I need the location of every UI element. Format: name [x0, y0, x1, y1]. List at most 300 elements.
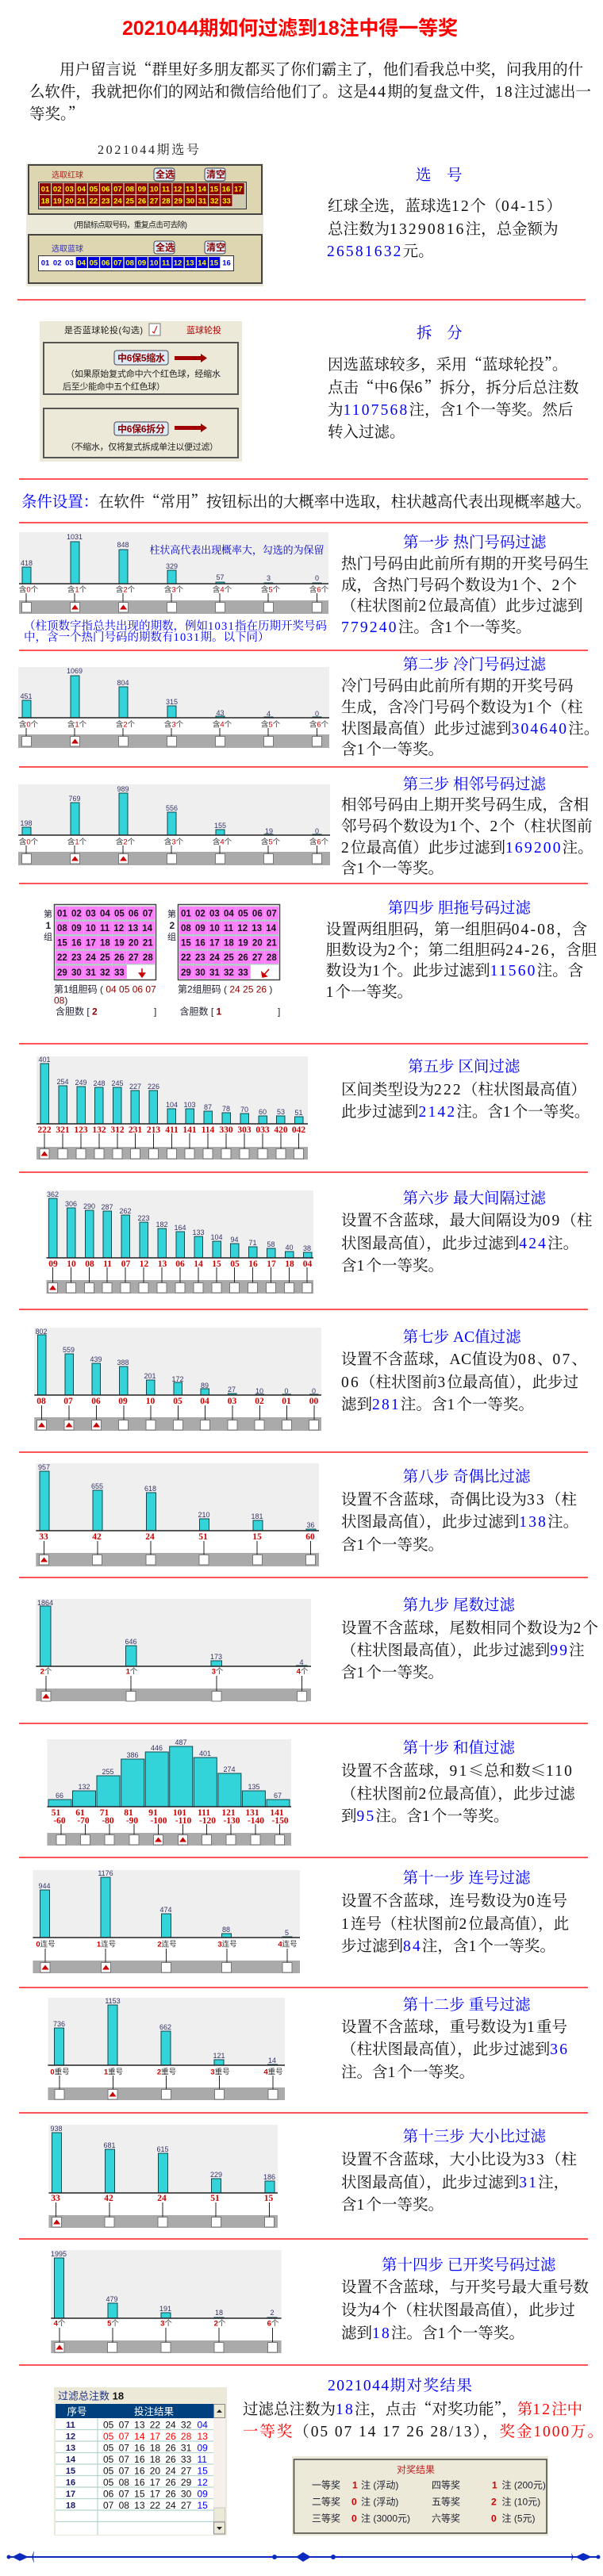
- bar chart: step 6: 94: [230, 1236, 239, 1244]
- results table: [54, 2387, 227, 2536]
- bar chart: step 3: 含1个: [67, 838, 87, 847]
- bar chart: step 6: [46, 1190, 313, 1294]
- chart note: [24, 619, 327, 644]
- bar chart: step 10: 131: [245, 1808, 259, 1818]
- panel: step 13: [48, 2125, 577, 2228]
- results table: 过滤总注数 18: [58, 2390, 124, 2402]
- bar chart: step 6: 04: [303, 1259, 313, 1269]
- prize summary box: 注 (3000元): [361, 2513, 410, 2524]
- heading: step 12: 第十二步 重号过滤: [403, 1996, 531, 2014]
- bar chart: step 1: 含3个: [164, 585, 184, 595]
- bar chart: step 6: 71: [248, 1239, 257, 1247]
- bar chart: step 7: 0: [312, 1387, 316, 1395]
- bar chart: step 6: 05: [230, 1259, 240, 1269]
- bar chart: step 2: 315: [166, 698, 178, 706]
- bar chart: step 10: -90: [126, 1816, 138, 1826]
- prize summary box: 注 (浮动): [361, 2479, 398, 2490]
- bar chart: step 11: 2连号: [157, 1940, 177, 1949]
- description: step 4: [326, 921, 597, 1001]
- bar chart: step 9: 4个: [297, 1667, 309, 1677]
- results table: 13: [66, 2444, 75, 2453]
- bar chart: step 14: 2: [270, 2309, 275, 2317]
- description: step 2: [341, 677, 599, 758]
- prize summary box: 对奖结果: [397, 2464, 435, 2475]
- bar chart: step 5: 51: [294, 1109, 303, 1117]
- bar chart: step 2: 1069: [67, 667, 83, 675]
- heading: step 1: 第一步 热门号码过滤: [403, 534, 547, 551]
- description: step 2: 生成，含冷门号码个数设为1个（柱: [341, 699, 583, 716]
- description: split: 转入过滤。: [328, 424, 405, 441]
- description: step 3: 含1个一等奖。: [341, 860, 444, 877]
- description: selection: 总注数为13290816注，总金额为: [328, 220, 559, 238]
- results table: 05 07 16 20 24 27 15: [103, 2465, 208, 2476]
- bar chart: step 5: 254: [56, 1078, 69, 1086]
- description: split: 为1107568注，含1个一等奖。然后: [328, 401, 573, 419]
- software screenshot: split options: 蓝球轮投: [186, 324, 221, 335]
- bar chart: step 1: 0: [315, 574, 319, 582]
- heading: step 6: 第六步 最大间隔过滤: [403, 1190, 546, 1207]
- bar chart: step 6: 06: [175, 1259, 185, 1269]
- bar chart: step 8: 655: [91, 1482, 103, 1490]
- description: step 12: （柱状图最高值），此步过滤到36: [341, 2041, 569, 2058]
- bar chart: step 2: 含2个: [116, 720, 136, 730]
- description: step 13: 设置不含蓝球，大小比设为33（柱: [341, 2151, 577, 2168]
- bar chart: step 1: 含0个: [19, 585, 39, 595]
- bar chart: step 6: 09: [48, 1259, 58, 1269]
- results table: 11: [66, 2421, 75, 2430]
- panel: number selection: [26, 143, 562, 286]
- description: step 5: 此步过滤到2142注。含1个一等奖。: [341, 1103, 590, 1121]
- bar chart: step 5: 249: [75, 1079, 87, 1087]
- description: step 10: 到95注。含1个一等奖。: [341, 1807, 509, 1825]
- number grids: dan tuo: 15 16 17 18 19 20 21: [57, 939, 153, 949]
- bar chart: step 10: 132: [78, 1783, 90, 1791]
- bar chart: step 8: 957: [38, 1463, 50, 1471]
- bar chart: step 1: 含5个: [261, 585, 281, 595]
- bar chart: step 7: 06: [91, 1397, 101, 1406]
- bar chart: step 5: 245: [111, 1079, 124, 1087]
- bar chart: step 6: 287: [101, 1203, 113, 1211]
- bar chart: step 13: 186: [263, 2173, 275, 2181]
- number grids: dan tuo: 08 09 10 11 12 13 14: [57, 924, 153, 933]
- description: step 7: [341, 1351, 587, 1413]
- software screenshot: ball selector: 18 19 20 21 22 23 24 25 26 27 28 29 30 31 32 33: [41, 197, 231, 206]
- results table: 16: [66, 2478, 75, 2487]
- prize summary box: 注 (浮动): [361, 2495, 398, 2508]
- prize summary box: 一等奖: [312, 2479, 340, 2490]
- description: step 14: 设置不含蓝球，与开奖号最大重号数: [341, 2279, 589, 2296]
- heading: step 9: 第九步 尾数过滤: [403, 1597, 515, 1614]
- panel: step 14: [51, 2250, 589, 2353]
- heading: step 5: 第五步 区间过滤: [408, 1058, 520, 1075]
- description: step 12: 设置不含蓝球，重号数设为1重号: [341, 2018, 567, 2036]
- bar chart: step 11: 1176: [98, 1869, 113, 1877]
- heading: step 8: 第八步 奇偶比过滤: [403, 1468, 531, 1485]
- bar chart: step 13: 42: [104, 2194, 113, 2203]
- bar chart: step 7: 10: [255, 1387, 263, 1395]
- bar chart: step 10: 487: [175, 1738, 187, 1746]
- number grids: dan tuo: 22 23 24 25 26 27 28: [181, 953, 277, 963]
- description: prize results: 过滤总注数为18注，点击“对奖功能”，第12注中: [243, 2397, 582, 2419]
- results table: 05 08 16 17 26 29 12: [103, 2477, 208, 2488]
- bar chart: step 3: 769: [68, 795, 81, 803]
- description: step 13: [341, 2151, 577, 2214]
- results table: 06 07 15 17 26 30 09: [103, 2489, 208, 2500]
- bar chart: step 13: 938: [50, 2125, 63, 2133]
- bar chart: step 10: 61: [75, 1808, 85, 1818]
- description: step 3: [341, 796, 593, 877]
- panel: step 2: [18, 656, 599, 758]
- bar chart: step 7: 10: [146, 1397, 156, 1406]
- bar chart: step 7: 388: [117, 1359, 129, 1367]
- bar chart: step 13: 681: [103, 2141, 116, 2149]
- description: prize results: 一等奖（05 07 14 17 26 28/13），奖金1000万。: [243, 2423, 603, 2440]
- prize summary box: 二等奖: [312, 2497, 340, 2508]
- bar chart: step 2: 含3个: [164, 720, 184, 730]
- software screenshot: ball selector: [26, 163, 263, 286]
- results table: 05 07 14 17 26 28 13: [103, 2431, 208, 2442]
- bar chart: step 13: 33: [51, 2194, 60, 2203]
- heading: selection: [416, 167, 463, 184]
- software screenshot: ball selector: 清空: [206, 241, 225, 253]
- bar chart: step 7: 27: [228, 1386, 236, 1393]
- bar chart: step 1: 含1个: [67, 585, 87, 595]
- bar chart: step 2: 451: [20, 692, 33, 700]
- panel: step 11: [33, 1869, 569, 1973]
- bar chart: step 3: 989: [117, 785, 129, 793]
- description: selection: 红球全选，蓝球选12个（04-15）: [328, 197, 562, 215]
- number grids: dan tuo: 2: [170, 920, 175, 931]
- panel: step 12: [48, 1996, 569, 2100]
- results table: 05 07 13 22 24 32 04: [103, 2419, 208, 2430]
- description: step 10: 设置不含蓝球，91≤总和数≤110: [341, 1758, 574, 1781]
- bar chart: step 5: 60: [259, 1108, 267, 1116]
- number grids: dan tuo: ]: [278, 1006, 280, 1017]
- software screenshot: ball selector: 01 02 03 04 05 06 07 08 09 10 11 12 13 14 15 16 17: [41, 186, 243, 194]
- bar chart: step 7: 05: [173, 1397, 182, 1406]
- bar chart: step 5: 103: [183, 1101, 196, 1109]
- results table: 05 07 16 18 26 33 11: [103, 2454, 207, 2465]
- number grids: dan tuo: 第: [167, 908, 176, 919]
- bar chart: step 5: 213: [147, 1125, 160, 1135]
- prize summary box: [292, 2456, 548, 2536]
- software screenshot: split options: 中6保6拆分: [117, 423, 165, 435]
- number grids: dan tuo: 15 16 17 18 19 20 21: [181, 939, 277, 949]
- bar chart: step 11: 474: [159, 1906, 172, 1914]
- description: step 10: （柱状图前2位最高值），此步过滤: [341, 1785, 575, 1803]
- bar chart: step 6: 306: [65, 1200, 77, 1208]
- bar chart: step 12: 1153: [105, 1997, 121, 2005]
- bar chart: step 5: 70: [240, 1106, 248, 1114]
- prize summary box: 1: [352, 2479, 358, 2490]
- bar chart: step 10: 71: [100, 1808, 109, 1818]
- prize summary box: 注 (10元): [501, 2495, 540, 2508]
- number grids: dan tuo: 08 09 10 11 12 13 14: [181, 924, 277, 933]
- bar chart: step 12: 14: [268, 2057, 276, 2064]
- bar chart: step 3: 含0个: [19, 838, 39, 847]
- software screenshot: split options: 是否蓝球轮投(勾选): [64, 324, 143, 335]
- bar chart: step 13: [48, 2125, 278, 2228]
- bar chart: step 10: -80: [102, 1816, 114, 1826]
- bar chart: step 14: 2个: [214, 2319, 226, 2329]
- software screenshot: ball selector: (用鼠标点取号码，重复点击可去除): [74, 220, 187, 230]
- number grids: dan tuo: 1: [46, 920, 51, 931]
- bar chart: step 5: 226: [148, 1083, 159, 1091]
- bar chart: step 8: 33: [39, 1532, 48, 1542]
- bar chart: step 1: 含4个: [213, 585, 232, 595]
- number grids: dan tuo: 第2组胆码 ( 24 25 26 ): [178, 983, 272, 995]
- bar chart: step 7: 09: [118, 1397, 128, 1406]
- number grids: dan tuo: 含胆数 [ 1: [179, 1006, 222, 1017]
- bar chart: step 3: 0: [315, 827, 319, 835]
- bar chart: step 10: 401: [199, 1750, 211, 1758]
- bar chart: step 5: 248: [93, 1079, 106, 1087]
- bar chart: step 12: 1重号: [104, 2067, 123, 2076]
- bar chart: step 3: 含6个: [309, 838, 329, 847]
- bar chart: step 9: 646: [125, 1638, 137, 1646]
- prize summary box: 四等奖: [432, 2479, 460, 2490]
- results table: 12: [66, 2432, 75, 2441]
- software screenshot: split options: （如果原始复式命中六个红色球，经缩水: [66, 368, 221, 379]
- prize summary box: 0: [351, 2497, 357, 2508]
- description: step 1: 779240注。含1个一等奖。: [341, 619, 532, 636]
- bar chart: step 6: 182: [156, 1221, 168, 1229]
- bar chart: step 11: 5: [285, 1929, 289, 1937]
- bar chart: step 13: 51: [210, 2194, 220, 2203]
- bar chart: step 7: 04: [200, 1397, 209, 1406]
- description: step 11: [341, 1892, 569, 1955]
- description: step 2: 状图最高值）此步过滤到304640注。: [341, 720, 599, 738]
- bar chart: step 5: 132: [92, 1125, 106, 1135]
- bar chart: step 5: 330: [219, 1125, 233, 1135]
- bar chart: step 14: 3个: [160, 2319, 172, 2329]
- bar chart: step 6: 164: [174, 1224, 186, 1232]
- description: step 1: 成，含热门号码个数设为1个、2个: [341, 577, 577, 594]
- bar chart: step 1: 3: [267, 574, 271, 582]
- bar chart: step 10: 446: [151, 1744, 163, 1752]
- software screenshot: ball selector: 16: [222, 259, 231, 268]
- bar chart: step 5: 303: [237, 1125, 252, 1135]
- bar chart: step 5: 033: [255, 1125, 270, 1135]
- heading: step 11: 第十一步 连号过滤: [403, 1869, 531, 1887]
- bar chart: step 5: 401: [38, 1056, 51, 1064]
- number grids: dan tuo: 01 02 03 04 05 06 07: [57, 909, 153, 918]
- number grids: dan tuo: ]: [154, 1006, 156, 1017]
- bar chart: step 5: 53: [277, 1108, 285, 1116]
- bar chart: step 8: 24: [145, 1532, 155, 1542]
- number grids: dan tuo: 29 30 31 32 33: [181, 968, 248, 978]
- bar chart: step 5: 231: [129, 1125, 142, 1135]
- intro paragraph: [29, 57, 591, 124]
- bar chart: step 6: 16: [248, 1259, 258, 1269]
- results table: 17: [66, 2490, 75, 2499]
- bar chart: step 10: 66: [56, 1792, 63, 1800]
- bar chart: step 2: 804: [117, 679, 129, 687]
- bar chart: step 5: 87: [204, 1103, 212, 1111]
- software screenshot: split options: 中6保5缩水: [117, 352, 165, 363]
- bar chart: step 1: 848: [117, 541, 129, 549]
- bar chart: step 7: 00: [309, 1397, 319, 1406]
- bar chart: step 5: 104: [166, 1101, 178, 1109]
- description: step 2: 含1个一等奖。: [341, 741, 444, 758]
- bar chart: step 2: 含0个: [19, 720, 39, 730]
- bar chart: step 12: 121: [213, 2052, 225, 2060]
- bar chart: step 7: 559: [63, 1346, 75, 1354]
- panel: step 1: [19, 532, 589, 644]
- software screenshot: split options: 后至少能命中五个红色球）: [63, 381, 165, 392]
- bar chart: step 12: [48, 1997, 285, 2100]
- chart note: （柱顶数字指总共出现的期数，例如1031指在历期开奖号码: [24, 619, 327, 633]
- bar chart: step 3: 19: [265, 827, 273, 835]
- software screenshot: ball selector: 全选: [156, 241, 175, 253]
- description: step 13: 含1个一等奖。: [341, 2196, 444, 2214]
- heading: split: 分: [447, 324, 463, 342]
- description: step 11: 步过滤到84注，含1个一等奖。: [341, 1938, 555, 1955]
- results table: 18: [66, 2501, 75, 2511]
- bar chart: step 3: 198: [20, 819, 33, 827]
- bar chart: step 10: -110: [175, 1816, 191, 1826]
- panel: step 10: [47, 1738, 575, 1846]
- bar chart: step 5: 114: [202, 1125, 215, 1135]
- prize summary box: 五等奖: [432, 2497, 460, 2508]
- bar chart: step 2: 含5个: [261, 720, 281, 730]
- bar chart: step 1: 418: [21, 559, 33, 567]
- bar chart: step 2: [18, 667, 329, 748]
- bar chart: step 14: 18: [215, 2309, 223, 2317]
- number grids: dan tuo: 22 23 24 25 26 27 28: [57, 953, 153, 963]
- bar chart: step 5: 222: [37, 1125, 52, 1135]
- bar chart: step 7: 08: [36, 1397, 46, 1406]
- bar chart: step 14: 191: [159, 2305, 171, 2313]
- bar chart: step 6: 104: [210, 1233, 223, 1241]
- number grids: dan tuo: 29 30 31 32 33: [57, 968, 125, 978]
- software screenshot: ball selector: 全选: [156, 168, 175, 180]
- bar chart: step 8: 181: [251, 1512, 263, 1520]
- bar chart: step 6: 11: [103, 1259, 112, 1269]
- bar chart: step 7: 172: [171, 1375, 184, 1383]
- bar chart: step 7: 0: [284, 1387, 289, 1395]
- bar chart: step 10: 121: [221, 1808, 236, 1818]
- prize summary box: 2: [491, 2497, 497, 2508]
- bar chart: step 11: 88: [222, 1926, 230, 1934]
- bar chart: step 14: 1995: [51, 2250, 67, 2258]
- bar chart: step 6: 10: [67, 1259, 76, 1269]
- bar chart: step 5: 78: [222, 1105, 230, 1113]
- heading: split: 拆: [417, 324, 432, 342]
- results table: 07 08 13 22 24 27 15: [103, 2500, 208, 2511]
- description: step 1: 热门号码由此前所有期的开奖号码生: [341, 555, 589, 573]
- software screenshot: ball selector: 选取红球: [52, 170, 83, 180]
- bar chart: step 6: 38: [303, 1244, 311, 1252]
- bar chart: step 8: 42: [92, 1532, 102, 1542]
- heading: step 2: 第二步 冷门号码过滤: [403, 656, 546, 673]
- bar chart: step 1: 329: [166, 562, 178, 570]
- bar chart: step 1: 柱状高代表出现概率大，勾选的为保留: [149, 544, 324, 557]
- panel: step 7: [34, 1328, 587, 1431]
- description: step 4: 胆数设为2个；第二组胆码24-26，含胆: [326, 941, 597, 959]
- number grids: dan tuo: 含胆数 [ 2: [56, 1006, 98, 1017]
- intro paragraph: 等奖。”: [29, 102, 83, 124]
- description: step 14: 设为4个（柱状图最高值），此步过: [341, 2302, 575, 2319]
- description: step 7: 设置不含蓝球，AC值设为08、07、: [341, 1351, 587, 1368]
- bar chart: step 7: [34, 1328, 321, 1431]
- software screenshot: ball selector: 01 02 03: [41, 259, 74, 268]
- bar chart: step 10: 67: [274, 1792, 282, 1800]
- prize summary box: 注 (200元): [501, 2479, 546, 2490]
- bar chart: step 9: 4: [299, 1658, 304, 1666]
- bar chart: step 1: 1031: [67, 533, 83, 541]
- description: split: 点击“中6保6”拆分，拆分后总注数: [328, 375, 579, 397]
- bar chart: step 10: 51: [52, 1808, 60, 1818]
- description: split: [328, 352, 579, 441]
- bar chart: step 6: 58: [267, 1240, 275, 1248]
- bar chart: step 1: 含2个: [116, 585, 136, 595]
- bar chart: step 6: 14: [194, 1259, 203, 1269]
- bar chart: step 7: 89: [201, 1382, 209, 1390]
- bar chart: step 8: 51: [198, 1532, 208, 1542]
- title: 2021044期如何过滤到18注中得一等奖: [122, 17, 458, 40]
- bar chart: step 12: 3重号: [210, 2067, 230, 2076]
- bar chart: step 1: [19, 532, 329, 614]
- number grids: dan tuo: 组: [44, 931, 52, 942]
- bar chart: step 5: 420: [274, 1125, 288, 1135]
- description: step 2: 冷门号码由此前所有期的开奖号码: [341, 677, 574, 695]
- description: step 4: 设置两组胆码，第一组胆码04-08，含: [326, 921, 587, 938]
- bar chart: step 5: 123: [74, 1125, 88, 1135]
- bar chart: step 10: -120: [199, 1816, 216, 1826]
- bar chart: step 6: 08: [85, 1259, 94, 1269]
- software screenshot: split options: [40, 321, 242, 462]
- panel: step 8: [36, 1463, 578, 1566]
- bar chart: step 10: -60: [53, 1816, 66, 1826]
- description: step 7: 滤到281注。含1个一等奖。: [341, 1396, 534, 1413]
- bar chart: step 2: 含6个: [309, 720, 329, 730]
- description: step 6: 设置不含蓝球，最大间隔设为09（柱: [341, 1212, 593, 1229]
- results table: 序号: [67, 2405, 87, 2417]
- bottom ornament divider: [6, 2551, 600, 2563]
- bar chart: step 8: 618: [144, 1485, 156, 1493]
- bar chart: step 9: 1个: [126, 1667, 138, 1677]
- heading: step 10: 第十步 和值过滤: [403, 1739, 515, 1757]
- bar chart: step 10: 81: [124, 1808, 133, 1818]
- software screenshot: split options: （不缩水，仅将复式拆成单注以便过滤）: [66, 441, 218, 452]
- chart note: 中，含一个热门号码的期数有1031期。以下同）: [24, 630, 270, 644]
- bar chart: step 11: 4连号: [278, 1940, 298, 1949]
- description: step 11: 1连号（柱状图前2位最高值），此: [341, 1915, 569, 1933]
- bar chart: step 5: [36, 1056, 308, 1160]
- bar chart: step 5: 411: [165, 1125, 179, 1135]
- bar chart: step 3: 含3个: [164, 838, 184, 847]
- bar chart: step 3: 含4个: [213, 838, 232, 847]
- description: step 4: 1个一等奖。: [326, 983, 413, 1001]
- bar chart: step 6: 15: [212, 1259, 221, 1269]
- panel: step 6: [46, 1190, 593, 1294]
- bar chart: step 7: 03: [228, 1397, 236, 1406]
- bar chart: step 6: 40: [285, 1244, 294, 1252]
- description: step 8: 状图最高值），此步过滤到138注。: [341, 1513, 578, 1531]
- heading: prize results: 2021044期对奖结果: [328, 2377, 472, 2394]
- condition settings note: 条件设置：在软件“常用”按钮标出的大概率中选取，柱状越高代表出现概率越大。: [21, 489, 591, 512]
- bar chart: step 3: 556: [166, 804, 178, 812]
- bar chart: step 5: 141: [182, 1125, 197, 1135]
- heading: step 14: 第十四步 已开奖号码过滤: [382, 2256, 556, 2274]
- description: prize results: [243, 2397, 603, 2440]
- bar chart: step 9: [36, 1599, 311, 1701]
- bar chart: step 13: 24: [157, 2194, 167, 2203]
- bar chart: step 10: 111: [198, 1808, 210, 1818]
- results table: 05 07 16 18 26 31 09: [103, 2443, 208, 2454]
- bar chart: step 12: 736: [53, 2020, 65, 2028]
